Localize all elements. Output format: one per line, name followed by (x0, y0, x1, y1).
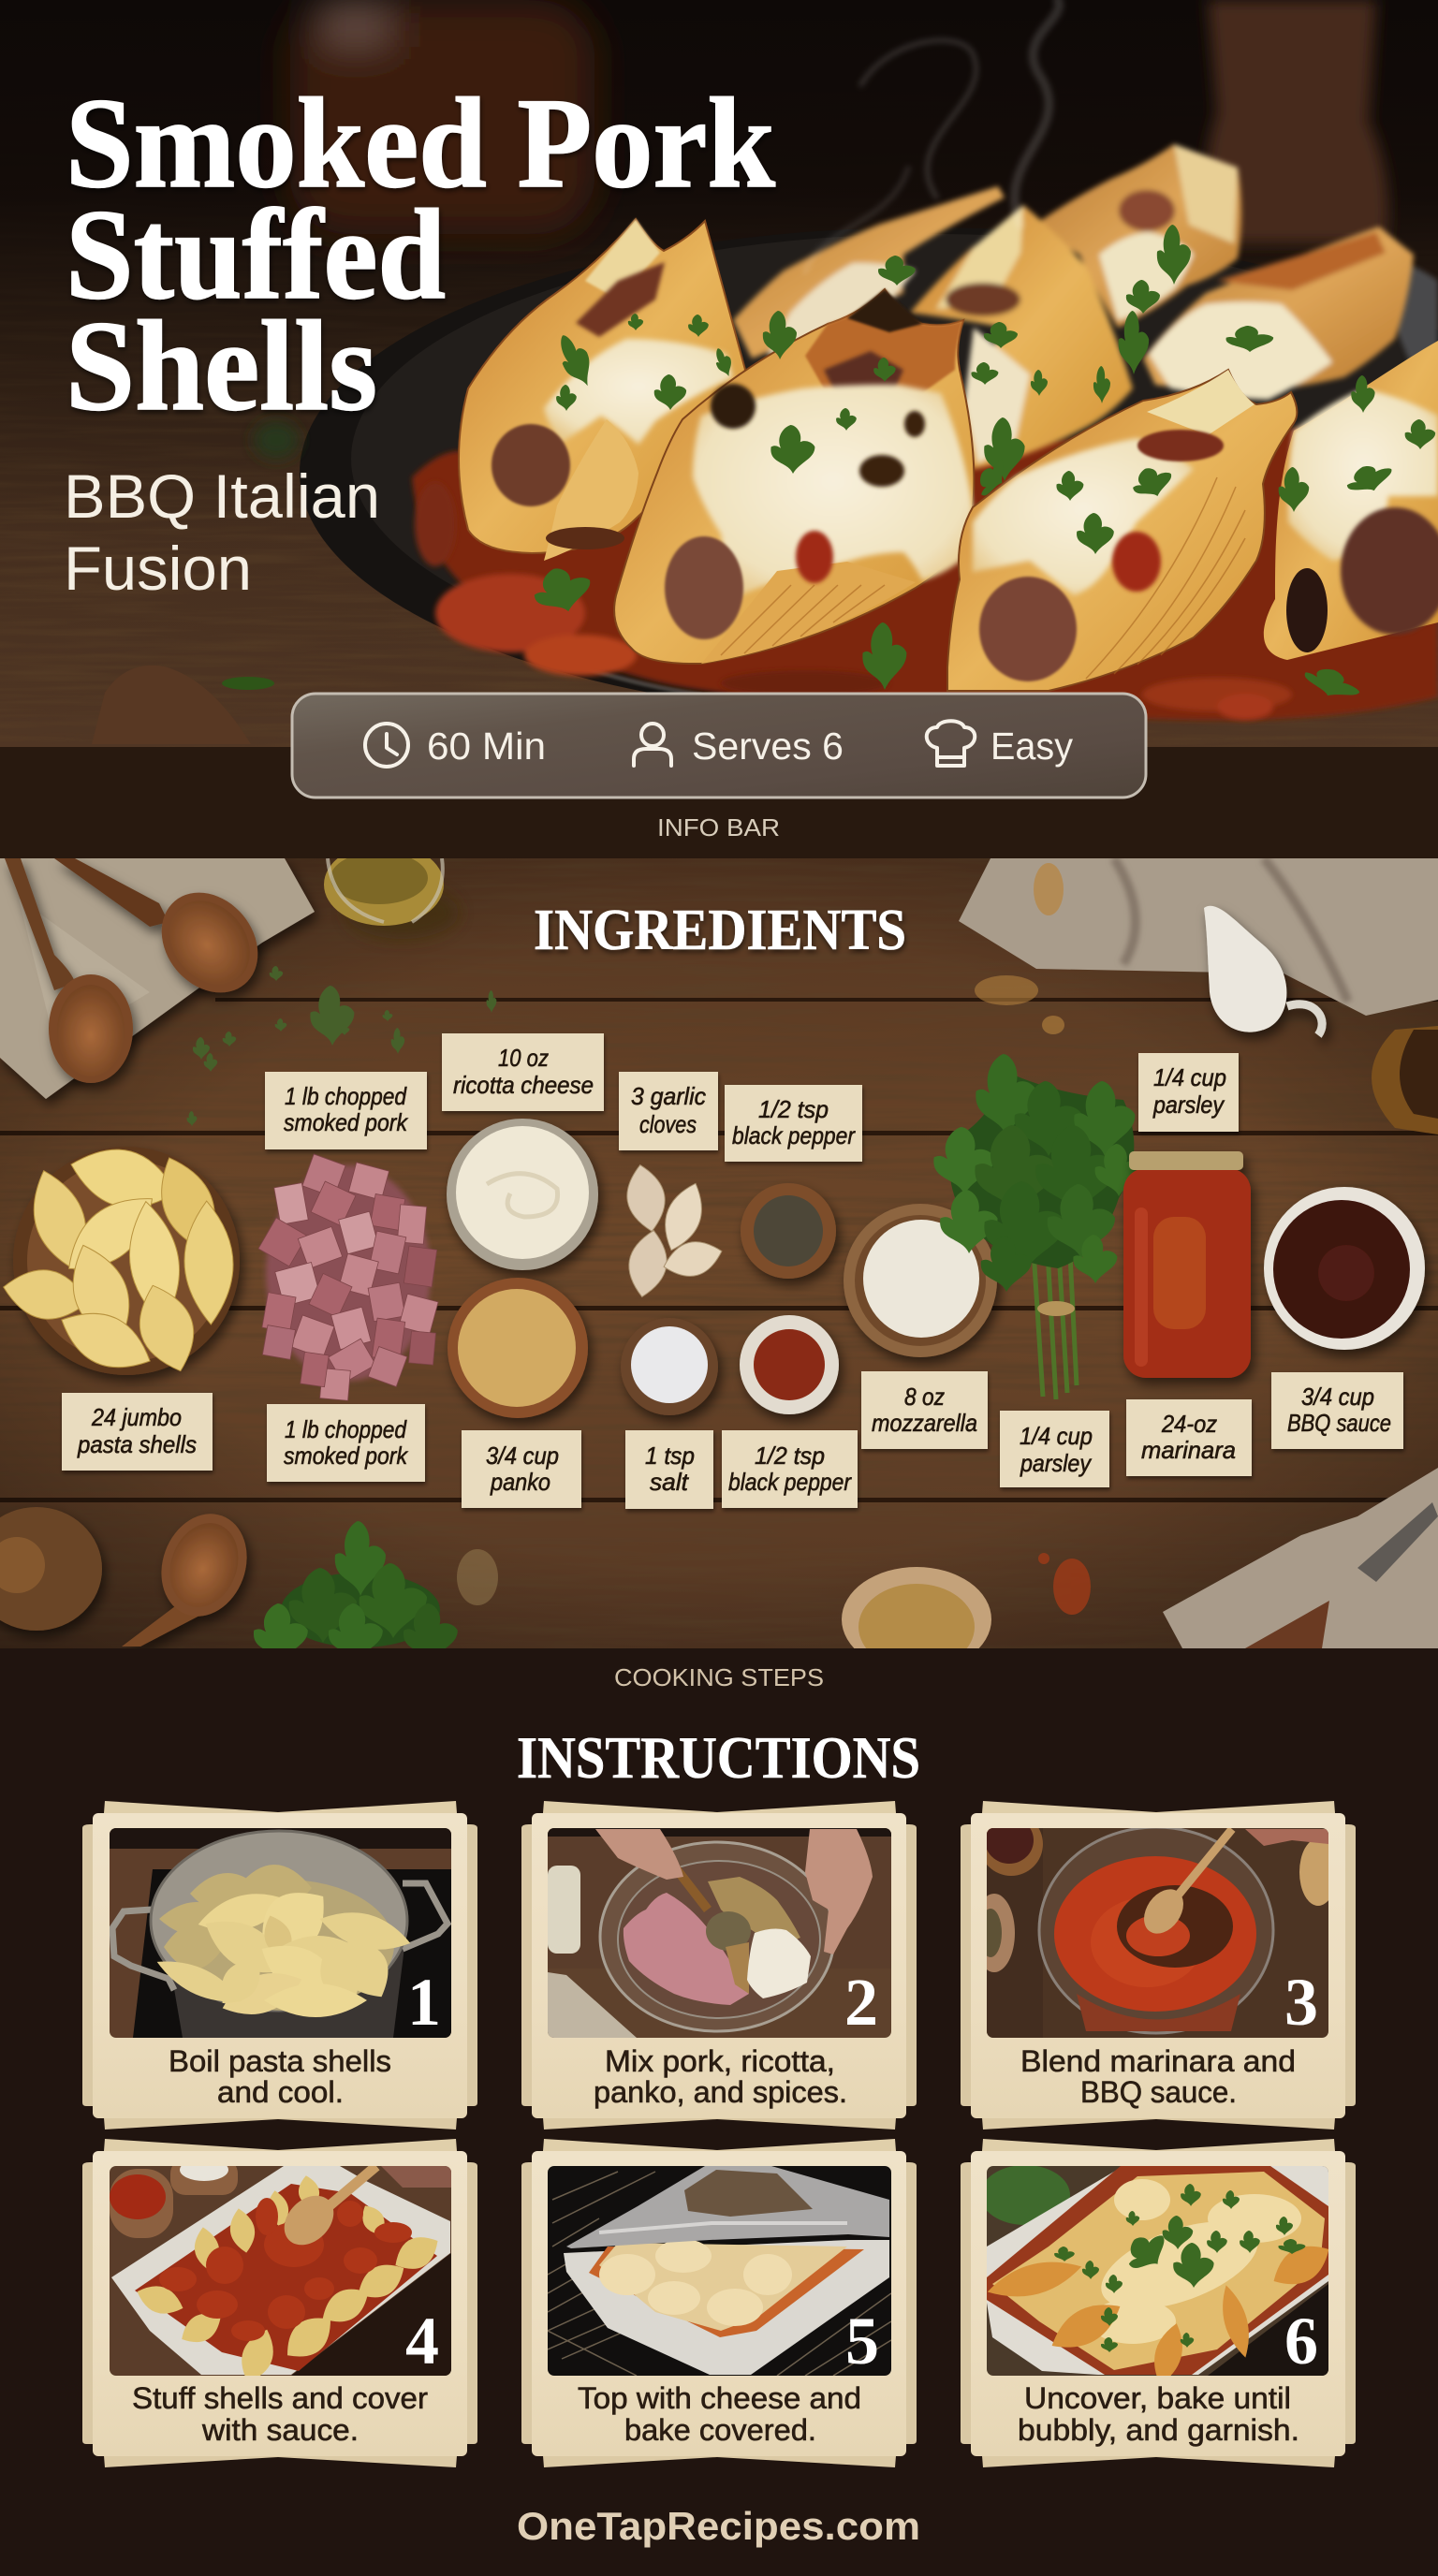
step number: 1 (407, 1965, 441, 2040)
bowl of salt (621, 1318, 718, 1415)
ingredient label: black pepper bottom (722, 1430, 858, 1508)
subtitle: BBQ Italian (64, 461, 380, 531)
step card 3 (961, 1801, 1356, 2130)
icon: person (634, 724, 671, 766)
bowl of chili flakes (740, 1315, 839, 1414)
ingredient label: ricotta: ricotta cheese (453, 1071, 594, 1099)
parsley bottom (254, 1521, 458, 1663)
ingredient label: parsley bottom (1000, 1411, 1109, 1487)
title: Smoked Pork (66, 71, 775, 214)
subtitle: Fusion (64, 534, 252, 603)
ingredient label: garlic (619, 1072, 718, 1150)
milk pitcher (1204, 906, 1322, 1035)
bowl of BBQ sauce (1264, 1187, 1425, 1350)
title: Shells (66, 294, 377, 437)
difficulty: Easy (990, 724, 1073, 768)
step text: panko, and spices. (594, 2075, 847, 2109)
spice scatter top-right (975, 863, 1064, 1034)
bowl of pasta shells (0, 1137, 240, 1383)
wooden board corner (92, 666, 251, 744)
ingredient label: parsley top: parsley (1152, 1090, 1225, 1119)
photo: mixing filling (548, 1828, 891, 2038)
ingredient label: mozzarella: 8 oz (904, 1383, 945, 1411)
step text: Stuff shells and cover (132, 2381, 428, 2415)
step text (169, 2044, 391, 2109)
panel: ingredients (0, 843, 1438, 1672)
ingredient label: pork bottom (267, 1404, 425, 1482)
heading: instructions: INSTRUCTIONS (517, 1724, 920, 1791)
napkin and fork bottom-right (1163, 1468, 1438, 1648)
ingredient label: marinara: marinara (1141, 1436, 1236, 1464)
ingredient label: ricotta: 10 oz (498, 1044, 549, 1072)
step text (1020, 2044, 1296, 2109)
ingredient label: marinara: 24-oz (1161, 1410, 1217, 1438)
step number: 2 (844, 1965, 878, 2040)
oil jar (324, 843, 459, 939)
ingredient label: BBQ sauce: BBQ sauce (1287, 1409, 1391, 1437)
ingredient label: panko: 3/4 cup (486, 1442, 559, 1470)
info bar (292, 694, 1146, 798)
ingredient label: BBQ sauce: 3/4 cup (1301, 1383, 1374, 1411)
ingredient label: pasta shells: 24 jumbo (91, 1403, 182, 1431)
chopped smoked pork pile (258, 1154, 438, 1400)
ingredient label: salt (625, 1430, 713, 1509)
step card 2 (521, 1801, 917, 2130)
small bowl bottom (842, 1567, 991, 1672)
mozzarella on plate (844, 1204, 997, 1357)
photo: blending sauce (974, 1812, 1337, 2038)
step text: Mix pork, ricotta, (605, 2044, 835, 2078)
parsley flecks on hero (222, 225, 1435, 706)
step text (578, 2381, 861, 2447)
step text: bubbly, and garnish. (1018, 2413, 1299, 2447)
herb scatter top (187, 966, 496, 1126)
pepper mill (1204, 0, 1388, 243)
servings: Serves 6 (692, 724, 844, 768)
bowl of panko (448, 1278, 588, 1418)
band under hero (0, 747, 1438, 859)
ingredient label: parsley top (1138, 1053, 1239, 1132)
step card 1 (82, 1801, 477, 2130)
title: Stuffed (66, 183, 446, 326)
wooden spoon bottom (122, 1501, 260, 1647)
step number: 4 (405, 2304, 439, 2378)
ingredient label: black pepper top: black pepper (732, 1121, 856, 1149)
ingredient label: pork bottom: smoked pork (284, 1442, 409, 1470)
ingredient label: pork top: smoked pork (284, 1108, 409, 1136)
wooden spoons top-left (5, 858, 278, 1083)
ingredient label: garlic: 3 garlic (631, 1082, 706, 1110)
step text: Blend marinara and (1020, 2044, 1296, 2078)
back shells (733, 144, 1414, 469)
ingredient label: panko: panko (490, 1468, 550, 1496)
ingredient label: marinara (1126, 1399, 1252, 1476)
step text: Boil pasta shells (169, 2044, 391, 2078)
steam (805, 0, 1059, 271)
step text: and cool. (217, 2075, 344, 2109)
skillet (300, 227, 1438, 718)
napkin top-left (0, 858, 315, 1099)
step number: 6 (1284, 2304, 1318, 2378)
photo: baking covered (548, 2166, 891, 2376)
napkin top-right (959, 858, 1438, 1016)
prep time: 60 Min (427, 724, 546, 768)
ingredient label: pasta shells: pasta shells (77, 1430, 197, 1458)
ingredient label: pork top (265, 1072, 427, 1149)
ingredient label: black pepper bottom: 1/2 tsp (755, 1442, 825, 1470)
hero photo: stuffed shells in skillet (0, 0, 1438, 747)
left shell (459, 219, 745, 561)
step text: with sauce. (201, 2413, 359, 2447)
ingredient label: salt: 1 tsp (645, 1442, 695, 1470)
ingredient label: pork bottom: 1 lb chopped (285, 1415, 407, 1443)
wooden knob (0, 1507, 102, 1631)
ingredient label: parsley bottom: 1/4 cup (1020, 1422, 1093, 1450)
bowl of ricotta (447, 1119, 598, 1270)
ingredient label: ricotta (442, 1033, 604, 1111)
ingredient label: mozzarella: mozzarella (872, 1409, 977, 1437)
chili scatter (1038, 1553, 1091, 1615)
label: cooking steps: COOKING STEPS (614, 1663, 824, 1691)
label: info bar: INFO BAR (657, 813, 780, 842)
step text: bake covered. (624, 2413, 816, 2447)
step text: Top with cheese and (578, 2381, 861, 2415)
footer: website: OneTapRecipes.com (517, 2504, 920, 2548)
ingredient label: salt: salt (650, 1468, 690, 1496)
step number: 3 (1284, 1965, 1318, 2040)
ingredient label: parsley top: 1/4 cup (1153, 1063, 1226, 1091)
marinara jar (1123, 1151, 1251, 1378)
ingredient label: black pepper bottom: black pepper (728, 1468, 852, 1496)
front-right shell (947, 370, 1297, 691)
step text (594, 2044, 847, 2109)
photo: stuffing shells (110, 2159, 451, 2388)
ingredient label: pasta shells (62, 1393, 213, 1471)
ingredient label: black pepper top: 1/2 tsp (758, 1095, 829, 1123)
step card 5 (521, 2139, 917, 2467)
step text: BBQ sauce. (1080, 2075, 1237, 2109)
ingredient label: black pepper top (725, 1085, 862, 1162)
photo: boiling pasta (110, 1828, 451, 2038)
ingredient label: panko (462, 1430, 581, 1508)
heading: ingredients: INGREDIENTS (534, 899, 906, 962)
far-right shell (1264, 341, 1438, 660)
step text: Uncover, bake until (1024, 2381, 1291, 2415)
sauce (412, 421, 1438, 721)
step text (132, 2381, 428, 2447)
parsley bunch (933, 1054, 1142, 1399)
bowl of black pepper (741, 1183, 836, 1279)
photo: finished dish (980, 2165, 1337, 2388)
subtitle (64, 461, 380, 603)
ingredient label: parsley bottom: parsley (1020, 1449, 1093, 1477)
title (66, 71, 775, 437)
garlic cloves (622, 1162, 726, 1300)
step number: 5 (845, 2304, 879, 2378)
panko scatter (457, 1549, 498, 1605)
amber jar right (1372, 1026, 1438, 1134)
background bottle (290, 0, 594, 234)
step text (1018, 2381, 1299, 2447)
ingredient label: garlic: cloves (639, 1110, 697, 1138)
step card 4 (82, 2139, 477, 2467)
ingredient label: BBQ sauce (1271, 1372, 1403, 1449)
icon: clock (365, 724, 408, 767)
ingredient label: mozzarella (861, 1371, 988, 1449)
center shell (614, 289, 974, 664)
icon: chef hat (927, 721, 975, 766)
ingredient label: pork top: 1 lb chopped (285, 1082, 407, 1110)
step card 6 (961, 2139, 1356, 2467)
